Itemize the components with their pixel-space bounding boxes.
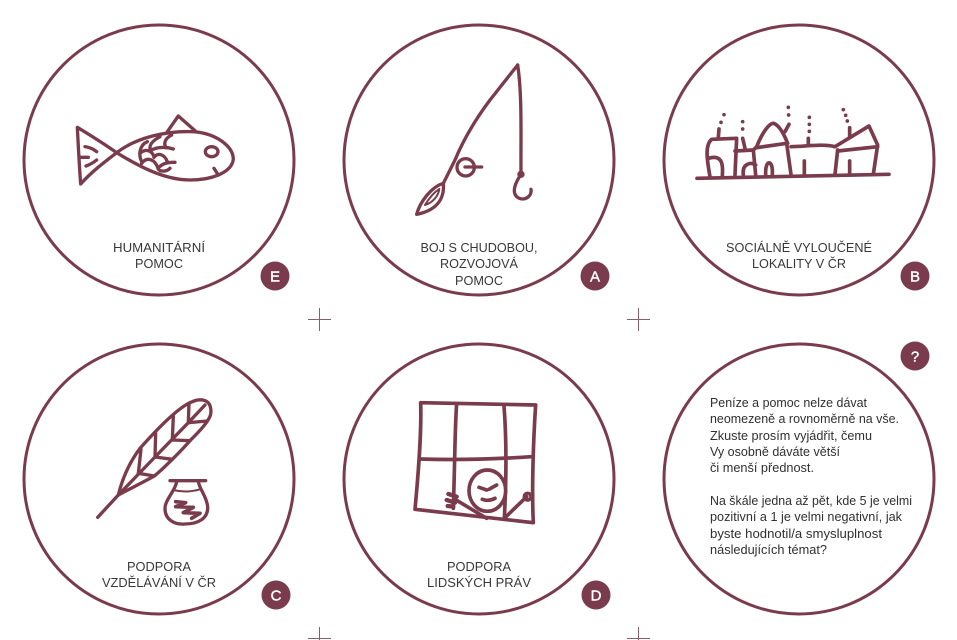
label: LOKALITY V ČR (752, 256, 846, 271)
panel: podpora lidských práv (344, 344, 614, 614)
badge C (262, 580, 290, 610)
badge D: D (591, 588, 602, 604)
circle outline (664, 344, 934, 614)
badge A (580, 262, 610, 290)
panel: sociálně vyloučené lokality (664, 25, 934, 295)
circle outline (344, 25, 614, 295)
badge E (260, 262, 290, 290)
label: POMOC (455, 273, 503, 288)
label (427, 559, 531, 590)
icon: fish (77, 116, 233, 184)
label (102, 559, 216, 590)
panel: boj s chudobou (344, 25, 614, 295)
badge D (582, 580, 610, 610)
label: SOCIÁLNĚ VYLOUČENÉ (726, 240, 872, 255)
icon: houses (697, 105, 889, 178)
badge B (900, 262, 930, 290)
panel: humanitární pomoc (24, 25, 294, 295)
label: PODPORA (127, 559, 191, 574)
question text: byste hodnotil/a smysluplnost (710, 527, 883, 541)
label (726, 240, 872, 271)
icon: face behind barred window (415, 403, 536, 523)
question text: Vy osobně dáváte větší (710, 445, 841, 459)
panel: otázka (664, 342, 934, 614)
circle outline (344, 344, 614, 614)
question text: pozitivní a 1 je velmi negativní, jak (710, 510, 903, 524)
label: POMOC (135, 256, 183, 271)
badge B: B (910, 268, 920, 286)
icon: feather and inkwell (98, 400, 211, 524)
label: LIDSKÝCH PRÁV (427, 575, 531, 590)
circle outline (24, 344, 294, 614)
plus signs (308, 308, 650, 640)
badge question mark: ? (911, 348, 919, 366)
panel: podpora vzdělávání (24, 344, 294, 614)
badge question mark (900, 342, 930, 370)
label (420, 240, 538, 288)
question text (710, 396, 912, 557)
badge C: C (271, 588, 282, 604)
label: VZDĚLÁVÁNÍ V ČR (102, 575, 216, 590)
question text: Zkuste prosím vyjádřit, čemu (710, 429, 872, 443)
badge A: A (590, 268, 600, 286)
question text: neomezeně a rovnoměrně na vše. (710, 412, 899, 426)
label: ROZVOJOVÁ (440, 256, 518, 271)
label (113, 240, 205, 271)
question text: Na škále jedna až pět, kde 5 je velmi (710, 494, 912, 508)
circle outline (664, 25, 934, 295)
question text: či menší přednost. (710, 461, 814, 475)
label: HUMANITÁRNÍ (113, 240, 205, 255)
badge E: E (270, 268, 280, 286)
question text: následujících témat? (710, 543, 827, 557)
question text: Peníze a pomoc nelze dávat (710, 396, 868, 410)
label: PODPORA (447, 559, 511, 574)
label: BOJ S CHUDOBOU, (420, 240, 538, 255)
circle outline (24, 25, 294, 295)
icon: fishing rod (417, 65, 531, 214)
